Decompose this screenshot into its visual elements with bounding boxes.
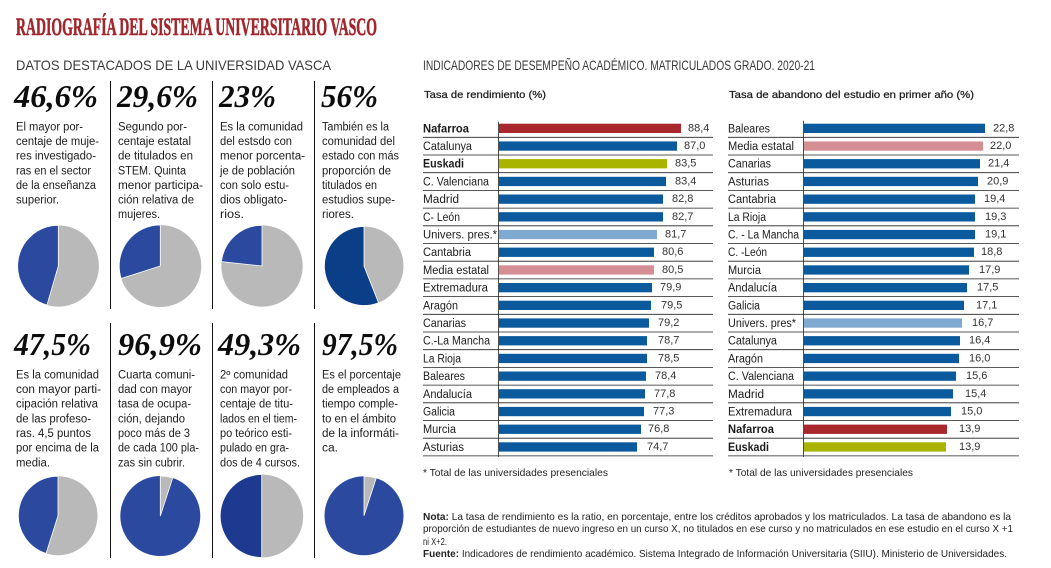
panel: 56% [321, 78, 404, 306]
row: Andalucía: 17,5 [977, 282, 998, 294]
row: Univers. pres.*: Univers. pres.* [423, 230, 498, 242]
stat text: También es la [322, 122, 390, 134]
stat text: dios obligato- [220, 194, 287, 206]
row: Andalucía: 77,8 [654, 388, 675, 400]
row: C. -León: 18,8 [981, 246, 1002, 258]
row: Extremadura: Extremadura [728, 406, 793, 418]
row: Aragón [728, 352, 990, 365]
stat text: 2º comunidad [220, 370, 288, 382]
stat text: con solo estu- [220, 180, 289, 192]
row: Catalunya [423, 140, 705, 153]
row: C. Valenciana: C. Valenciana [728, 371, 795, 383]
chart title: Tasa de rendimiento (%) [424, 89, 546, 101]
row: Asturias [728, 175, 1008, 188]
row: C. -León: C. -León [728, 247, 767, 259]
row: Andalucía [423, 388, 675, 401]
row: Asturias [423, 441, 668, 454]
pie chart [119, 225, 201, 307]
stat text: de empleados a [322, 384, 400, 396]
stat text [322, 122, 399, 221]
row: Andalucía [728, 282, 998, 295]
pie chart [18, 225, 99, 307]
bar chart: tasa de rendimiento [423, 89, 713, 479]
row: Asturias: Asturias [423, 442, 464, 454]
stat text: estado con más [322, 150, 399, 162]
pie chart [18, 476, 97, 555]
row: C. Valenciana: 15,6 [966, 370, 987, 382]
row: Madrid: Madrid [728, 389, 764, 401]
row: Euskadi: Euskadi [728, 442, 769, 454]
panel: 46,6% [13, 78, 99, 307]
stat text: de titulados en [118, 150, 193, 162]
row: Univers. pres*: Univers. pres* [728, 318, 796, 330]
row: C- León [423, 211, 693, 224]
stat text: El mayor por- [16, 122, 83, 134]
panel: 47,5% [13, 326, 101, 555]
row: Nafarroa: Nafarroa [728, 424, 775, 436]
stat text: centaje de titu- [220, 399, 293, 411]
chart title: Tasa de abandono del estudio en primer año (%) [729, 89, 974, 101]
row: Cantabria [728, 193, 1005, 206]
row: Extremadura: 15,0 [961, 406, 982, 418]
stat text: dad con mayor [118, 384, 192, 396]
row: Galicia [728, 299, 997, 312]
row: Madrid: 82,8 [672, 193, 693, 205]
bar chart: tasa de abandono [728, 89, 1019, 479]
source text: Fuente: Indicadores de rendimiento académico. Sistema Integrado de Información Universitaria (SIIU). Ministerio de Universidades. [423, 548, 1007, 560]
row: C. - La Mancha [728, 228, 1006, 242]
stat text: mujeres. [118, 209, 160, 221]
row: C. - La Mancha: C. - La Mancha [728, 230, 800, 242]
row: Andalucía: Andalucía [423, 389, 473, 401]
stat text: superior. [16, 194, 59, 206]
row: Galicia [423, 406, 674, 418]
stat text: de la informáti- [322, 428, 399, 440]
stat text: Segundo por- [118, 122, 187, 134]
stat text: cipación relativa [16, 399, 99, 411]
stat number: 56% [321, 78, 378, 114]
stat text [16, 370, 101, 469]
row: Nafarroa: 88,4 [688, 122, 709, 134]
row: La Rioja: La Rioja [423, 353, 462, 365]
stat text: proporción de [322, 166, 391, 178]
panel: 96,9% [118, 326, 202, 556]
stat text: con mayor por- [220, 384, 292, 396]
stat text: rios. [220, 209, 244, 221]
row: Murcia: Murcia [728, 265, 762, 277]
row: C.-La Mancha [423, 335, 679, 348]
row: Andalucía: Andalucía [728, 283, 778, 295]
stat text: de cada 100 pla- [118, 443, 199, 455]
row: Nafarroa: 13,9 [959, 423, 980, 435]
row: C. Valenciana [423, 175, 696, 188]
row: Galicia: Galicia [728, 300, 761, 312]
row: Cantabria [423, 246, 683, 259]
row: Murcia: Murcia [423, 424, 457, 436]
row: Aragón: Aragón [423, 300, 458, 312]
row: Catalunya: 16,4 [969, 335, 990, 347]
stat text: centaje estatal [118, 136, 191, 148]
row: Media estatal [423, 264, 683, 277]
stat text: Es la comunidad [16, 370, 99, 382]
row: Galicia: 17,1 [976, 299, 997, 311]
stat text [118, 370, 199, 469]
row: Baleares: 22,8 [993, 122, 1014, 134]
row: Murcia [423, 423, 669, 436]
stat text: res investigado- [16, 150, 96, 162]
row: C- León: C- León [423, 212, 460, 224]
stat text: por encima de la [16, 443, 100, 455]
row: Extremadura: Extremadura [423, 283, 489, 295]
stat text: ras. 4,5 puntos [16, 428, 91, 440]
row: Madrid: 15,4 [965, 388, 986, 400]
stat text: Es el porcentaje [322, 370, 401, 382]
stat number: 29,6% [116, 78, 198, 114]
row: C. -León [728, 246, 1002, 259]
title: RADIOGRAFÍA DEL SISTEMA UNIVERSITARIO VASCO [16, 13, 377, 41]
row: Catalunya: 87,0 [684, 140, 705, 152]
pie chart [324, 226, 404, 306]
row: Nafarroa [728, 423, 980, 436]
pie chart [120, 476, 200, 556]
row: Catalunya: Catalunya [423, 141, 473, 153]
row: Cantabria: 80,6 [662, 246, 683, 258]
row: Baleares: Baleares [728, 123, 770, 135]
row: Nafarroa [423, 122, 709, 135]
stat number: 23% [218, 78, 276, 114]
row: Canarias: Canarias [423, 318, 466, 330]
row: Canarias [423, 317, 679, 330]
row: Media estatal: Media estatal [423, 265, 489, 277]
row: Asturias: Asturias [728, 176, 769, 188]
row: La Rioja: 19,3 [985, 211, 1006, 223]
row: Univers. pres.*: 81,7 [665, 228, 686, 240]
row: Aragón: 16,0 [969, 352, 990, 364]
stat text: dos de 4 cursos. [220, 457, 300, 469]
row: La Rioja [423, 352, 679, 365]
row: Media estatal: 80,5 [662, 264, 683, 276]
row: Extremadura: 79,9 [660, 282, 681, 294]
row: Canarias: 79,2 [658, 317, 679, 329]
stat text: del estsdo con [220, 136, 292, 148]
row: C. Valenciana [728, 370, 987, 383]
row: Cantabria: Cantabria [728, 194, 777, 206]
stat text: Cuarta comuni- [118, 370, 195, 382]
row: Madrid [728, 388, 986, 401]
row: La Rioja: La Rioja [728, 212, 767, 224]
row: Euskadi [423, 158, 696, 171]
stat text: ras en el sector [16, 166, 91, 178]
row: Univers. pres.* [423, 228, 686, 242]
row: Media estatal [728, 140, 1011, 153]
stat text: tiempo comple- [322, 399, 398, 411]
row: Madrid: Madrid [423, 194, 459, 206]
notes and source [423, 511, 1013, 560]
row: Canarias: Canarias [728, 159, 771, 171]
row: Euskadi [728, 441, 980, 454]
panel: 29,6% [116, 78, 203, 307]
stat text: ca. [322, 443, 338, 455]
row: Media estatal: Media estatal [728, 141, 794, 153]
row: C. Valenciana: 83,4 [675, 175, 696, 187]
row: Murcia: 76,8 [648, 423, 669, 435]
note text [423, 511, 1013, 548]
stat text: estudios supe- [322, 194, 395, 206]
row: Baleares: 78,4 [655, 370, 676, 382]
stat text: comunidad del [322, 136, 395, 148]
row: Cantabria: Cantabria [423, 247, 472, 259]
stat text: je de población [219, 166, 295, 178]
row: Murcia [728, 264, 1000, 277]
stat number: 47,5% [13, 326, 91, 362]
row: Baleares [423, 370, 676, 383]
row: C.-La Mancha: 78,7 [658, 335, 679, 347]
stat number: 46,6% [13, 78, 98, 114]
stat text: ción relativa de [118, 194, 194, 206]
stat text [322, 370, 401, 455]
footnote: * Total de las universidades presenciales [729, 467, 913, 479]
row: C.-La Mancha: C.-La Mancha [423, 336, 491, 348]
stat text [16, 122, 99, 206]
panel: 23% [218, 78, 305, 307]
row: Catalunya: Catalunya [728, 336, 778, 348]
stat text: centaje de muje- [16, 136, 99, 148]
footnote: * Total de las universidades presenciales [423, 467, 608, 479]
stat text: tasa de ocupa- [118, 399, 191, 411]
stat text: con mayor parti- [16, 384, 101, 396]
row: Aragón: 79,5 [661, 299, 682, 311]
row: C. Valenciana: C. Valenciana [423, 176, 490, 188]
heading: indicadores: INDICADORES DE DESEMPEÑO ACADÉMICO. MATRICULADOS GRADO. 2020-21 [423, 57, 815, 73]
row: Nafarroa: Nafarroa [423, 123, 470, 135]
stat number: 96,9% [118, 326, 202, 362]
panel: 97,5% [322, 326, 404, 555]
row: Galicia: 77,3 [653, 406, 674, 418]
row: Euskadi: 83,5 [675, 158, 696, 170]
stat text: ción, dejando [118, 413, 185, 425]
note text: Nota: La tasa de rendimiento es la ratio, en porcentaje, entre los créditos aprobados y los matriculados. La tasa de abandono es la [423, 511, 1011, 523]
row: Asturias: 74,7 [647, 441, 668, 453]
heading: datos destacados: DATOS DESTACADOS DE LA UNIVERSIDAD VASCA [16, 57, 332, 73]
pie chart [221, 225, 303, 307]
stat text [219, 122, 305, 221]
row: Canarias: 21,4 [988, 158, 1009, 170]
row: Asturias: 20,9 [987, 175, 1008, 187]
row: Extremadura [423, 282, 681, 295]
stat text: menor participa- [118, 180, 203, 192]
note text: proporción de estudiantes de nuevo ingreso en un curso X, no titulados en ese curso y no matriculados en ese estudio en el curso X +1 [423, 523, 1013, 535]
stat text [118, 122, 203, 221]
stat text: media. [16, 457, 50, 469]
stat text: STEM. Quinta [118, 166, 187, 178]
row: Euskadi: Euskadi [423, 159, 464, 171]
stat text: riores. [322, 209, 354, 221]
row: Madrid [423, 193, 693, 206]
stat text: lados en el tiem- [220, 413, 297, 425]
stat text: poco más de 3 [118, 428, 190, 440]
row: Cantabria: 19,4 [984, 193, 1005, 205]
stat text [220, 370, 300, 469]
row: C. - La Mancha: 19,1 [985, 228, 1006, 240]
row: Baleares [728, 122, 1014, 135]
row: Univers. pres* [728, 317, 993, 330]
row: Extremadura [728, 406, 982, 418]
stat text: de la enseñanza [16, 180, 97, 192]
note text: ni X+2. [423, 536, 447, 548]
row: Catalunya [728, 335, 990, 348]
stat text: menor porcenta- [220, 150, 305, 162]
stat text: Es la comunidad [220, 122, 303, 134]
row: La Rioja: 78,5 [658, 352, 679, 364]
pie chart [324, 476, 404, 555]
stat text: titulados en [322, 180, 377, 192]
stat number: 97,5% [322, 326, 398, 362]
row: Baleares: Baleares [423, 371, 465, 383]
row: Univers. pres*: 16,7 [972, 317, 993, 329]
stat text: zas sin cubrir. [118, 457, 185, 469]
row: Media estatal: 22,0 [990, 140, 1011, 152]
row: Galicia: Galicia [423, 406, 456, 418]
pie chart [220, 474, 303, 558]
panel: 49,3% [217, 326, 303, 558]
stat number: 49,3% [217, 326, 301, 362]
row: La Rioja [728, 211, 1006, 224]
row: Euskadi: 13,9 [959, 441, 980, 453]
stat text: pulado en gra- [220, 443, 289, 455]
row: Canarias [728, 158, 1009, 171]
stat text: po teórico esti- [220, 428, 292, 440]
stat text: de las profeso- [16, 413, 91, 425]
row: Murcia: 17,9 [979, 264, 1000, 276]
stat text: to en el ámbito [322, 413, 396, 425]
row: C- León: 82,7 [672, 211, 693, 223]
row: Aragón: Aragón [728, 353, 763, 365]
row: Aragón [423, 299, 682, 312]
